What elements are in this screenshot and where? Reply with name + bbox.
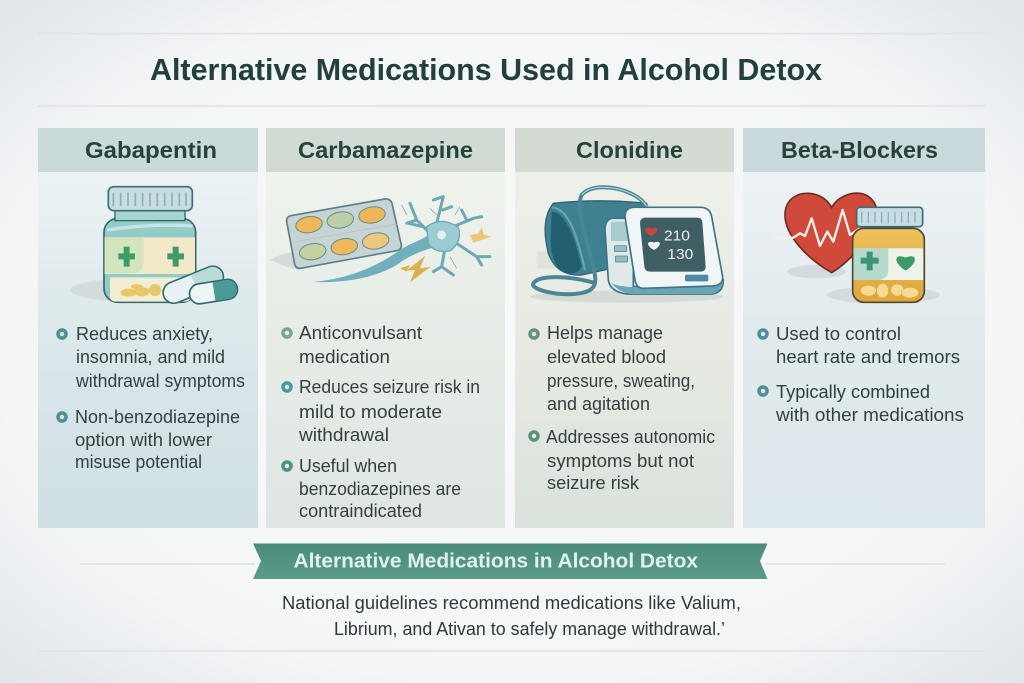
- bullets: Carbamazepine: Anticonvulsant: [299, 323, 422, 343]
- footer note: [282, 593, 741, 639]
- bullets: Beta-Blockers: Used to control: [776, 324, 901, 344]
- bullets: Gabapentin: withdrawal symptoms: [75, 371, 245, 391]
- heading: Gabapentin: Gabapentin: [85, 137, 217, 163]
- icon: blister pack and neuron: [270, 197, 492, 282]
- heading: Gabapentin: [38, 128, 258, 172]
- bullets: Beta-Blockers: [759, 324, 964, 425]
- heading: Beta-Blockers: Beta-Blockers: [781, 137, 938, 163]
- bullets: Clonidine: Addresses autonomic: [546, 427, 715, 447]
- bullets: Beta-Blockers: heart rate and tremors: [776, 347, 960, 367]
- bullets: Carbamazepine: mild to moderate: [299, 402, 442, 422]
- bullets: Beta-Blockers: with other medications: [775, 405, 964, 425]
- bullets: Carbamazepine: medication: [299, 347, 390, 367]
- panel: Carbamazepine: [266, 128, 505, 528]
- bullets: Carbamazepine: benzodiazepines are: [299, 479, 461, 499]
- bullets: Carbamazepine: contraindicated: [299, 501, 422, 521]
- bullets: Carbamazepine: withdrawal: [298, 425, 389, 445]
- bullets: Clonidine: Helps manage: [547, 323, 663, 343]
- bullets: Clonidine: seizure risk: [547, 473, 640, 493]
- icon: pill bottle with capsules: [70, 187, 239, 306]
- footer note: National guidelines recommend medications like Valium,: [282, 593, 741, 613]
- bullets: Clonidine: symptoms but not: [547, 451, 694, 471]
- bullets: Carbamazepine: Useful when: [299, 456, 397, 476]
- banner: Alternative Medications in Alcohol Detox: [294, 550, 699, 572]
- heading: Carbamazepine: [266, 128, 505, 172]
- banner: [253, 544, 768, 579]
- bullets: Gabapentin: Non-benzodiazepine: [75, 407, 240, 427]
- panel: Clonidine: [515, 128, 734, 528]
- icon: blood pressure monitor: 210: [664, 229, 690, 245]
- footer note: Librium, and Ativan to safely manage withdrawal.’: [334, 619, 725, 639]
- bullets: Gabapentin: option with lower: [75, 430, 212, 450]
- icon: blood pressure monitor: 130: [667, 247, 693, 263]
- bullets: Gabapentin: insomnia, and mild: [76, 347, 225, 367]
- bullets: Gabapentin: misuse potential: [75, 452, 202, 472]
- bullets: Carbamazepine: Reduces seizure risk in: [299, 377, 480, 397]
- bullets: Clonidine: elevated blood: [547, 347, 666, 367]
- bullets: Clonidine: and agitation: [547, 394, 650, 414]
- bullets: Beta-Blockers: Typically combined: [776, 382, 930, 402]
- icon: blood pressure monitor: [530, 187, 723, 303]
- heading: Clonidine: Clonidine: [576, 137, 683, 163]
- panel: Beta-Blockers: [743, 128, 985, 528]
- bullets: Clonidine: [530, 323, 715, 493]
- heading: Beta-Blockers: [743, 128, 985, 172]
- title: Alternative Medications Used in Alcohol Detox: [150, 52, 823, 87]
- heading: Clonidine: [515, 128, 734, 172]
- icon: heart and pill bottle: [773, 193, 940, 304]
- bullets: Clonidine: pressure, sweating,: [547, 371, 695, 391]
- bullets: Gabapentin: Reduces anxiety,: [76, 324, 213, 344]
- panel: Gabapentin: [38, 128, 258, 528]
- heading: Carbamazepine: Carbamazepine: [298, 137, 473, 163]
- bullets: Gabapentin: [58, 324, 245, 472]
- bullets: Carbamazepine: [283, 323, 480, 521]
